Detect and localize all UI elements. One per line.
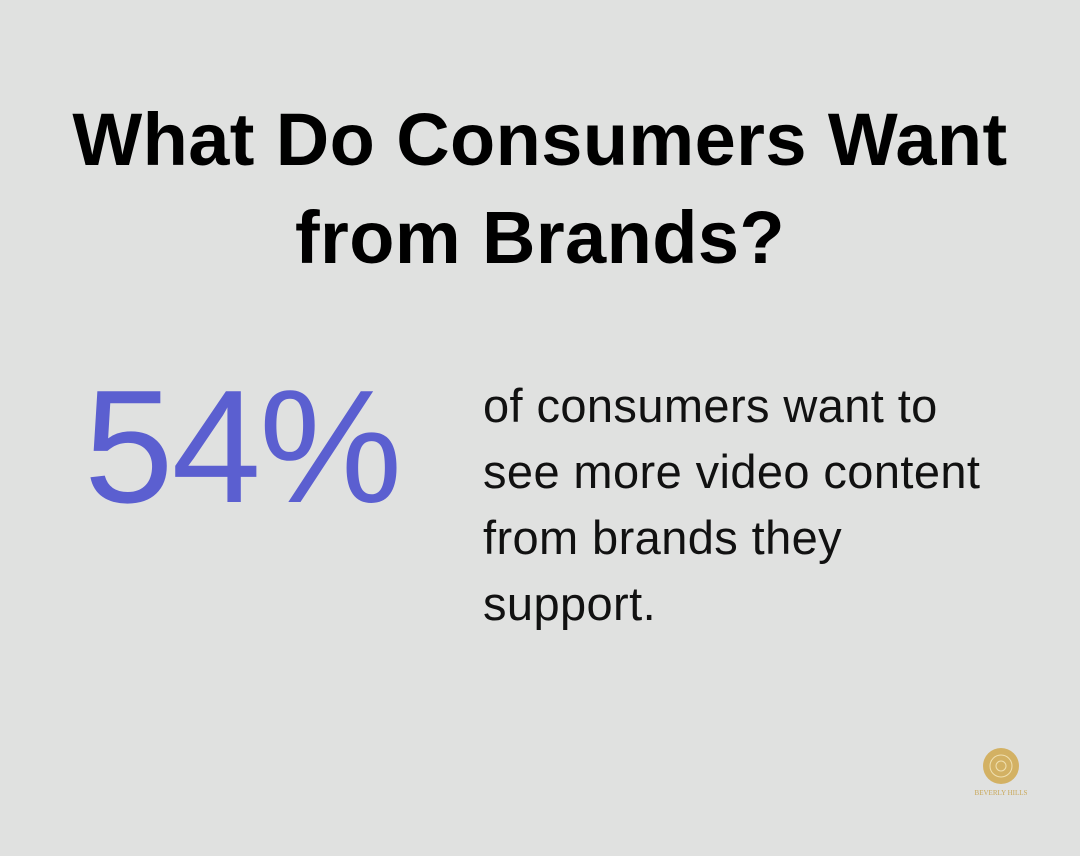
logo: Beverly Hills Publishing [974,748,1028,797]
title: from Brands? [295,196,785,279]
title: What Do Consumers Want [72,98,1008,181]
statistic description [483,379,980,630]
statistic description: see more video content [483,445,980,498]
logo text: BEVERLY HILLS [975,789,1028,797]
big statistic: 54% [84,357,400,537]
icon: gold emblem [983,748,1019,784]
title [72,98,1008,279]
statistic description: support. [483,577,656,630]
statistic description: from brands they [483,511,842,564]
statistic description: of consumers want to [483,379,938,432]
